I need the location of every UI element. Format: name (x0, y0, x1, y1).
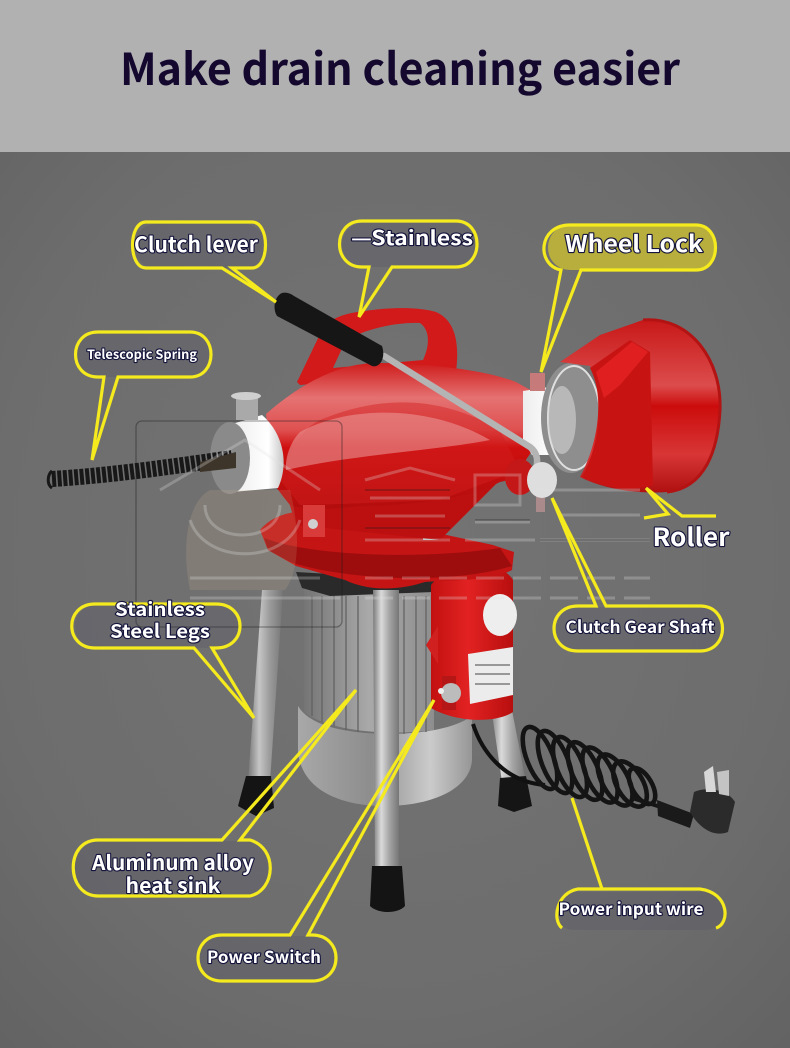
body highlight (286, 413, 490, 470)
callout: Stainless Steel Legs: Steel Legs (110, 617, 210, 644)
red roller drum (560, 320, 720, 492)
neck collar (523, 386, 570, 455)
callout: Power Switch: Power Switch (207, 944, 321, 968)
callout: Clutch Gear Shaft (552, 498, 722, 651)
callout: Power input wire: Power input wire (558, 895, 704, 920)
callout: Stainless: —Stainless (351, 222, 473, 251)
callout: Wheel Lock: Wheel Lock (565, 225, 703, 259)
lever grip (275, 293, 383, 366)
telescopic spring (48, 452, 236, 488)
clutch gear shaft (505, 459, 557, 512)
stainless bowl (298, 706, 472, 806)
back left leg (238, 590, 283, 816)
neck bracket (303, 505, 325, 537)
callout: Telescopic Spring (76, 332, 212, 460)
callout: Aluminum alloy heat sink: Aluminum alloy (91, 846, 254, 876)
aluminum motor fins (296, 572, 434, 734)
clutch lever rod (384, 356, 537, 468)
body red crease (280, 402, 520, 505)
watermark logo (136, 421, 650, 627)
callout: Stainless (340, 221, 477, 317)
callout: Power input wire (556, 798, 725, 930)
drain cleaning machine (48, 293, 735, 912)
red body housing (266, 363, 534, 509)
carrying handle (297, 308, 457, 385)
callout: Aluminum alloy heat sink: heat sink (126, 869, 221, 899)
callout: Clutch Gear Shaft: Clutch Gear Shaft (566, 613, 714, 638)
callout: Roller (644, 488, 730, 554)
callout: Aluminum alloy heat sink (73, 690, 356, 899)
callout: Clutch lever (132, 222, 276, 302)
callout: Stainless Steel Legs (72, 595, 254, 718)
red switch box (426, 565, 517, 720)
mounting flange (260, 511, 514, 588)
front nozzle cap (232, 415, 284, 492)
power cord and plug (473, 723, 735, 834)
small top stud (530, 373, 545, 391)
front leg (370, 590, 405, 912)
callout: Wheel Lock (541, 225, 716, 372)
body neck (282, 480, 500, 540)
callout: Power Switch (198, 700, 434, 981)
top stud (231, 392, 261, 420)
callout: Roller: Roller (652, 518, 730, 554)
callout: Stainless Steel Legs: Stainless (115, 595, 205, 622)
title banner (0, 0, 790, 152)
callout: Telescopic Spring: Telescopic Spring (87, 344, 197, 363)
back right leg (490, 700, 532, 812)
steel plate (541, 363, 601, 473)
callout: Clutch lever: Clutch lever (134, 229, 259, 259)
title: Make drain cleaning easier (120, 34, 681, 98)
